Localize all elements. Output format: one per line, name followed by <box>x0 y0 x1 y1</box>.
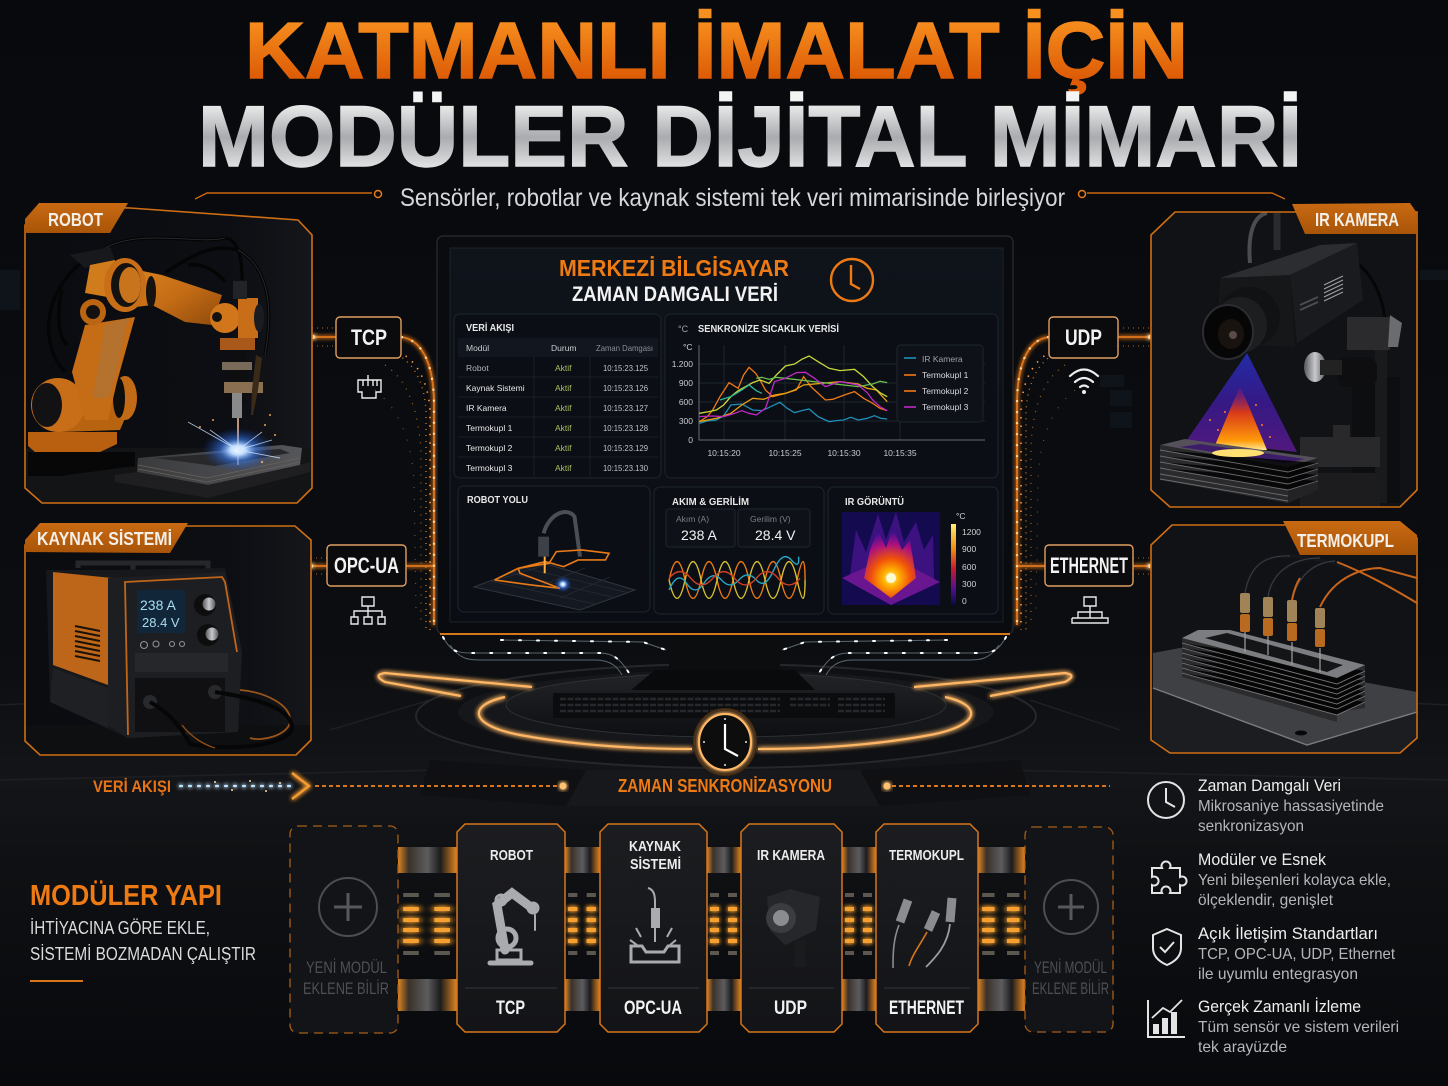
title <box>198 6 1302 185</box>
panel: data stream table: Aktif <box>555 403 572 413</box>
modular structure text: MODÜLER YAPI <box>30 879 222 912</box>
welding tab: KAYNAK SİSTEMİ <box>37 529 172 549</box>
feature: timestamped data <box>1148 776 1384 835</box>
panel: IR image: 300 <box>962 579 976 589</box>
panel: data stream table: 10:15:23.125 <box>603 363 648 373</box>
panel: welding system <box>25 523 312 755</box>
panel: data stream table: IR Kamera <box>466 403 507 413</box>
keyboard <box>553 693 895 718</box>
data flow arrow: VERİ AKIŞI <box>93 777 171 796</box>
icon: camera <box>766 889 820 967</box>
panel: robot path <box>458 486 650 612</box>
icon: sensor probes <box>893 898 952 968</box>
data flow lines to monitor <box>309 328 1152 630</box>
panel: robot <box>25 203 312 503</box>
robot tab <box>25 203 128 233</box>
thermal image <box>842 512 940 605</box>
module: IR camera <box>741 824 842 1032</box>
panel: IR image: 1200 <box>962 527 981 537</box>
time sync label <box>315 776 1110 796</box>
module: thermocouple <box>876 824 978 1032</box>
module: IR camera: IR KAMERA <box>757 848 825 864</box>
module: add right <box>1025 827 1113 1032</box>
thermocouple tab: TERMOKUPL <box>1297 531 1394 551</box>
robot tab: ROBOT <box>48 210 103 230</box>
chart legend: IR Kamera <box>922 354 963 364</box>
thermocouple illustration <box>1153 556 1417 753</box>
panel: temperature chart: 10:15:35 <box>883 448 917 458</box>
panel: data stream table: Termokupl 3 <box>466 463 513 473</box>
feature: real-time monitoring <box>1148 997 1399 1056</box>
panel: data stream table: Durum <box>551 343 577 353</box>
welding machine illustration <box>25 563 312 755</box>
feature list <box>1148 776 1399 1056</box>
dashboard heading <box>559 255 789 306</box>
protocol: UDP <box>1049 317 1118 358</box>
panel: data stream table: Aktif <box>555 383 572 393</box>
feature: modular: Modüler ve Esnek <box>1198 850 1326 869</box>
dashboard heading: MERKEZİ BİLGİSAYAR <box>559 255 789 281</box>
module connectors <box>398 847 1025 1011</box>
module: welding: KAYNAK <box>629 839 681 855</box>
panel: temperature chart: 0 <box>688 435 693 445</box>
feature: open standards: ile uyumlu entegrasyon <box>1198 966 1358 983</box>
chart legend: Termokupl 3 <box>922 402 969 412</box>
module: welding <box>600 824 707 1032</box>
panel: current and voltage: 238 A <box>681 527 717 543</box>
title line 2: MODÜLER DİJİTAL MİMARİ <box>198 89 1302 185</box>
panel: data stream table <box>454 314 661 478</box>
subtitle <box>195 184 1285 212</box>
panel: temperature chart: SENKRONİZE SICAKLIK VERİSİ <box>698 322 839 335</box>
icon: wifi <box>1070 370 1098 394</box>
robot illustration <box>25 238 312 503</box>
module: IR camera: UDP <box>774 998 807 1019</box>
icon: robot arm <box>490 893 538 963</box>
panel: current and voltage: 28.4 V <box>755 527 796 543</box>
module: robot: ROBOT <box>490 848 533 864</box>
module: add left: EKLENE BİLİR <box>303 979 389 998</box>
thermocouple tab <box>1283 521 1417 555</box>
panel: IR camera <box>1151 203 1417 507</box>
panel: IR image: 600 <box>962 562 976 572</box>
icon: orange clock <box>831 259 873 301</box>
IR camera tab: IR KAMERA <box>1315 210 1399 230</box>
protocol: TCP: TCP <box>351 325 387 350</box>
panel: temperature chart: 1.200 <box>672 359 693 369</box>
panel: data stream table: Aktif <box>555 363 572 373</box>
panel: current and voltage: AKIM & GERİLİM <box>672 495 749 508</box>
panel: data stream table: Termokupl 1 <box>466 423 513 433</box>
welding display readout: 28.4 V <box>142 615 180 630</box>
panel: data stream table: Termokupl 2 <box>466 443 513 453</box>
IR camera illustration <box>1160 213 1402 507</box>
panel: temperature chart: °C <box>683 342 693 352</box>
module: welding: SİSTEMİ <box>630 856 681 873</box>
panel: temperature chart: 600 <box>679 397 693 407</box>
chart legend: Termokupl 2 <box>922 386 969 396</box>
chart legend: Termokupl 1 <box>922 370 969 380</box>
feature: real-time monitoring: Tüm sensör ve sistem verileri <box>1198 1019 1399 1036</box>
panel: IR image: IR GÖRÜNTÜ <box>845 495 904 508</box>
panel: temperature chart: 900 <box>679 378 693 388</box>
modular structure text: SİSTEMİ BOZMADAN ÇALIŞTIR <box>30 944 256 964</box>
modular structure text <box>30 879 256 981</box>
panel: data stream table: VERİ AKIŞI <box>466 321 514 334</box>
feature: timestamped data: Mikrosaniye hassasiyetinde <box>1198 798 1384 815</box>
panel: data stream table: Aktif <box>555 443 572 453</box>
panel: thermocouple <box>1151 521 1417 753</box>
panel: IR image: 0 <box>962 596 967 606</box>
panel: temperature chart: 10:15:25 <box>768 448 802 458</box>
waveforms <box>669 557 805 598</box>
welding display readout: 238 A <box>140 597 176 613</box>
icon: sync clock <box>694 709 756 775</box>
panel: current and voltage <box>654 487 824 614</box>
glowing time sync ring <box>378 673 1072 749</box>
panel: data stream table: 10:15:23.129 <box>603 443 648 453</box>
monitor stand and base <box>416 636 1036 806</box>
panel: robot path: ROBOT YOLU <box>467 495 528 506</box>
protocol: Ethernet: ETHERNET <box>1050 553 1128 578</box>
feature: real-time monitoring: Gerçek Zamanlı İzleme <box>1198 997 1361 1016</box>
icon: network tree <box>351 597 385 624</box>
IR camera tab <box>1292 203 1417 234</box>
welding display readout <box>140 600 180 627</box>
feature: modular: Yeni bileşenleri kolayca ekle, <box>1198 872 1391 889</box>
feature: open standards: Açık İletişim Standartları <box>1198 924 1378 943</box>
panel: data stream table: Zaman Damgası <box>596 343 653 353</box>
module: robot: TCP <box>496 998 525 1019</box>
module: robot <box>457 824 565 1032</box>
panel: data stream table: 10:15:23.127 <box>603 403 648 413</box>
icon: ethernet port <box>358 375 381 398</box>
protocol: OPC-UA: OPC-UA <box>334 553 399 578</box>
panel: data stream table: 10:15:23.126 <box>603 383 648 393</box>
monitor <box>437 236 1013 634</box>
subtitle: Sensörler, robotlar ve kaynak sistemi tek veri mimarisinde birleşiyor <box>400 184 1065 212</box>
panel: temperature chart: 10:15:20 <box>707 448 741 458</box>
dashboard heading: ZAMAN DAMGALI VERİ <box>572 283 778 306</box>
panel: temperature chart: 300 <box>679 416 693 426</box>
feature: open standards: TCP, OPC-UA, UDP, Ethernet <box>1198 946 1396 963</box>
panel: data stream table: Robot <box>466 363 489 373</box>
time sync label: ZAMAN SENKRONİZASYONU <box>618 776 832 796</box>
protocol: UDP: UDP <box>1065 325 1102 350</box>
title line 1: KATMANLI İMALAT İÇİN <box>245 6 1188 95</box>
panel: IR image: °C <box>956 511 966 521</box>
welding tab <box>25 523 188 553</box>
feature: open standards <box>1153 924 1396 983</box>
panel: temperature chart: °C <box>678 324 689 334</box>
feature: modular <box>1152 850 1391 909</box>
panel: data stream table: Kaynak Sistemi <box>466 383 525 393</box>
modular structure text: İHTİYACINA GÖRE EKLE, <box>30 918 210 938</box>
panel: temperature chart: 10:15:30 <box>827 448 861 458</box>
protocol: TCP <box>336 317 401 358</box>
panel: data stream table: Modül <box>466 343 489 353</box>
icon: welding torch <box>630 888 679 962</box>
panel: current and voltage: Akım (A) <box>676 514 709 524</box>
module: welding: OPC-UA <box>624 998 682 1019</box>
chart legend <box>897 345 983 422</box>
panel: data stream table: Aktif <box>555 423 572 433</box>
module: add left <box>290 826 398 1033</box>
feature: modular: ölçeklendir, genişlet <box>1198 892 1334 909</box>
data flow arrow <box>93 773 309 799</box>
feature: timestamped data: senkronizasyon <box>1198 818 1304 835</box>
module: add right: EKLENE BİLİR <box>1032 979 1109 998</box>
icon: network hub <box>1072 597 1108 623</box>
panel: IR image: 900 <box>962 544 976 554</box>
panel: data stream table: 10:15:23.128 <box>603 423 648 433</box>
protocol: OPC-UA <box>327 545 406 586</box>
module: thermocouple: TERMOKUPL <box>889 848 964 864</box>
chart lines <box>699 356 887 423</box>
module: thermocouple: ETHERNET <box>889 998 964 1019</box>
panel: temperature chart <box>665 314 998 478</box>
module: add left: YENİ MODÜL <box>306 958 387 977</box>
feature: real-time monitoring: tek arayüzde <box>1198 1039 1287 1056</box>
module: add right: YENİ MODÜL <box>1034 958 1107 977</box>
panel: IR image <box>828 487 998 614</box>
panel: current and voltage: Gerilim (V) <box>750 514 791 524</box>
feature: timestamped data: Zaman Damgalı Veri <box>1198 776 1341 795</box>
panel: data stream table: 10:15:23.130 <box>603 463 648 473</box>
protocol: Ethernet <box>1045 545 1133 586</box>
glowing circuit lines under monitor <box>443 637 1006 675</box>
panel: data stream table: Aktif <box>555 463 572 473</box>
